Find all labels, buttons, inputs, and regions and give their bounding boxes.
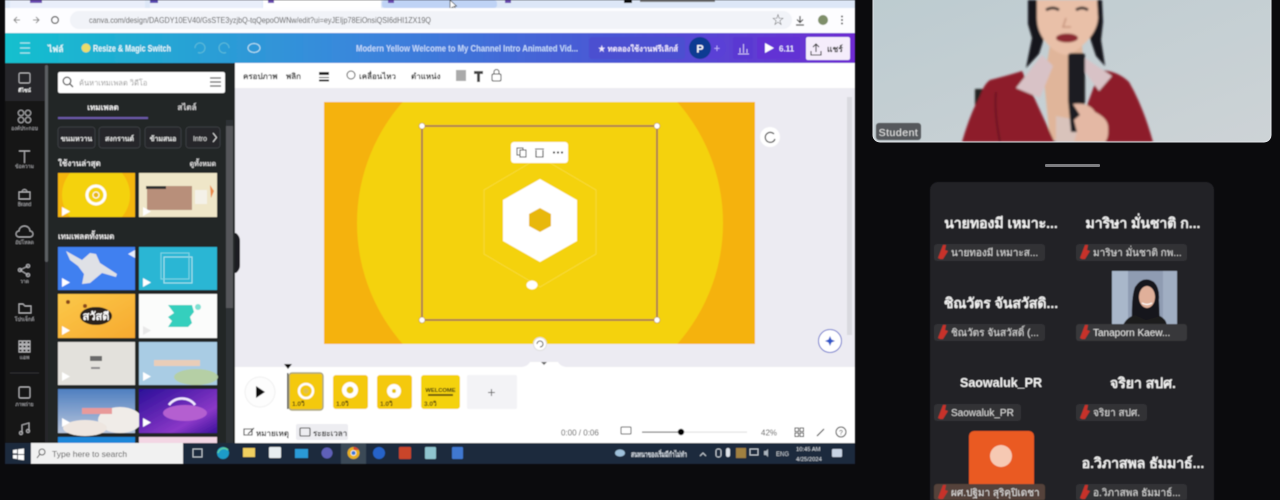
microphone <box>1068 53 1085 132</box>
filter chips: Intro <box>193 136 207 143</box>
notes and duration controls <box>244 424 348 440</box>
neck <box>1044 45 1085 140</box>
participant: ชิณวัตร: ชิณวัตร จันสวัสดิ์ (... <box>951 325 1039 339</box>
Student label <box>876 123 921 140</box>
search box: Type here to search <box>52 449 127 459</box>
left icon rail: อัปโหลด <box>15 239 34 246</box>
timeline strip <box>235 362 855 444</box>
browser tab strip <box>5 0 855 10</box>
Canva top bar: P <box>696 44 704 56</box>
time readout and zoom slider <box>561 427 846 438</box>
participant: Saowaluk_PR <box>934 376 1042 421</box>
selection frame <box>419 123 660 323</box>
participant: มาริษา: มาริษา มั่นชาติ ก... <box>1086 213 1200 231</box>
template side panel <box>48 63 235 444</box>
filter chips: สงกรานต์ <box>105 134 134 143</box>
participant: มาริษา: มาริษา มั่นชาติ กพ... <box>1093 245 1182 259</box>
browser address bar: ☆ <box>772 13 784 27</box>
thumbnail: white with teal blob <box>139 294 217 338</box>
hand <box>1073 104 1108 142</box>
participant: ชิณวัตร <box>934 295 1058 341</box>
yellow circle <box>356 102 724 344</box>
system tray <box>615 447 842 463</box>
left icon rail: โปรเจ็กต์ <box>15 315 34 323</box>
recently used heading <box>58 157 216 169</box>
outer faint hexagon <box>484 157 596 287</box>
nose shadow <box>1063 18 1071 27</box>
left icon rail: องค์ประกอบ <box>11 125 38 132</box>
refresh button <box>760 127 780 147</box>
collar left <box>1016 55 1053 98</box>
participant: ชิณวัตร: ชิณวัตร จันสวัสดิ... <box>944 295 1058 311</box>
magic assistant button <box>818 330 842 352</box>
Canva top bar <box>5 33 855 63</box>
Windows taskbar <box>5 443 855 464</box>
left icon rail: ข้อความ <box>15 163 34 170</box>
editor toolbar <box>235 63 855 88</box>
participant: มาริษา <box>1076 213 1200 261</box>
editor toolbar: เคลื่อนไหว <box>359 70 397 81</box>
time readout and zoom slider: 0:00 / 0:06 <box>561 428 599 438</box>
time readout and zoom slider: ? <box>839 430 843 437</box>
left icon rail: ภาพถ่าย <box>15 402 34 408</box>
thumbnail: sky and leaves <box>139 342 218 385</box>
participant: จริยา <box>1076 375 1176 421</box>
left icon rail: Brand <box>18 202 31 208</box>
participant: นายทองมี: นายทองมี เหมาะ... <box>944 215 1058 231</box>
start button <box>13 448 24 460</box>
panel tabs: สไตล์ <box>177 102 197 112</box>
participant: นายทองมี <box>934 215 1058 261</box>
system tray: สนทนาของเริ่มมีกำไม่ทำ <box>631 448 687 459</box>
add clip button: + <box>487 384 496 400</box>
floating element toolbar <box>511 142 568 163</box>
small white dot <box>526 280 538 290</box>
search box <box>58 72 225 93</box>
Canva top bar: แชร์ <box>827 44 843 54</box>
left icon rail <box>5 63 48 444</box>
participant: Saowaluk_PR: Saowaluk_PR <box>951 408 1014 419</box>
thumbnail: teal frames <box>139 247 217 290</box>
participant: Saowaluk_PR: Saowaluk_PR <box>960 376 1042 390</box>
shared screen: browser window <box>5 0 855 464</box>
Canva top bar: 6.11 <box>779 44 795 54</box>
panel tabs: เทมเพลต <box>87 103 119 112</box>
thumbnail: blue splash <box>58 247 135 290</box>
pinned apps <box>193 443 463 464</box>
face <box>1037 0 1098 55</box>
participant: อ.วิภาสพล: อ.วิภาสพล ธัมมาธ์... <box>1082 455 1204 471</box>
notes and duration controls: ระยะเวลา <box>313 429 347 438</box>
system tray: 4/25/2024 <box>796 457 823 463</box>
Canva top bar: ★ ทดลองใช้งานฟรีเลิกส์ <box>598 44 678 54</box>
notes and duration controls: หมายเหตุ <box>256 429 289 439</box>
panel tabs <box>58 102 197 119</box>
thumbnail: orange greeting: สวัสดี <box>83 310 109 323</box>
participant: จริยา: จริยา สปศ. <box>1110 375 1176 391</box>
clip thumbnails <box>289 373 460 410</box>
Canva top bar: + <box>714 43 720 55</box>
eyes and brows <box>1046 8 1088 10</box>
thumbnail: orange greeting <box>58 294 135 338</box>
chair <box>975 89 985 105</box>
participants panel <box>930 182 1214 500</box>
playhead <box>284 364 292 369</box>
presenter <box>962 0 1153 142</box>
participant: orange avatar: ผศ.ปฐิมา สุริคุปิเดชา <box>951 488 1040 499</box>
play button <box>245 377 275 407</box>
participant: Tanaporn with photo: Tanaporn Kaew... <box>1093 328 1170 339</box>
partial thumbnails <box>58 437 217 444</box>
left icon rail: ดีไซน์ <box>18 87 31 94</box>
system tray: ENG <box>776 452 789 458</box>
rotate handle <box>534 338 546 350</box>
thumbnail: clouds <box>58 389 142 436</box>
white hexagon <box>503 179 577 262</box>
presenter video tile <box>873 0 1271 142</box>
participant: จริยา: จริยา สปศ. <box>1093 408 1140 419</box>
editor toolbar: พลิก <box>286 72 301 81</box>
inner hexagon <box>529 208 551 232</box>
lips <box>1056 34 1078 42</box>
shirt <box>1056 116 1078 142</box>
design canvas <box>323 101 756 345</box>
video tile outline <box>873 0 1271 142</box>
participant: orange avatar <box>934 431 1045 500</box>
clip thumbnails: 1.0วิ <box>380 400 393 408</box>
clip thumbnails: 3.0วิ <box>424 400 437 408</box>
system tray: 10:45 AM <box>796 447 821 453</box>
Canva top bar: ไฟล์ <box>47 44 64 54</box>
participant: อ.วิภาสพล: อ.วิภาสพล ธัมมาธ์... <box>1093 487 1181 499</box>
panel scrollbar <box>226 120 233 444</box>
add clip button <box>467 375 517 409</box>
participant: นายทองมี: นายทองมี เหมาะส... <box>951 247 1038 259</box>
recently used heading: ใช้งานล่าสุด <box>58 158 101 169</box>
clip thumbnails: WELCOME <box>425 388 456 394</box>
participant: อ.วิภาสพล <box>1076 455 1204 500</box>
panel collapse handle <box>235 233 240 273</box>
Canva top bar: Resize & Magic Switch <box>93 44 171 54</box>
editor toolbar: ตำแหน่ง <box>411 72 441 81</box>
filter chips: ขนมหวาน <box>61 136 92 143</box>
collar right <box>1083 58 1112 91</box>
left icon rail: แอพ <box>20 355 29 361</box>
browser address bar: canva.com/design/DAGDY10EV40/GsSTE3yzjbQ-tqQepoOWNw/edit?ui=eyJEIjp78EiOnsiQSI6dHI1ZX19Q <box>89 15 431 25</box>
thumbnail: recent photo <box>139 173 217 217</box>
browser address bar <box>5 8 855 33</box>
thumbnail: purple neon <box>139 389 217 433</box>
participant: Tanaporn with photo <box>1076 271 1187 341</box>
thumbnail: recent yellow intro <box>57 172 136 218</box>
filter chips: ข้ามสนอ <box>150 134 176 143</box>
canvas scrollbar <box>847 97 852 335</box>
time readout and zoom slider: 42% <box>761 428 777 438</box>
all results heading: เทมเพลตทั้งหมด <box>58 230 114 241</box>
thumbnail: grey paper <box>58 342 135 385</box>
blazer <box>962 70 1153 142</box>
editor toolbar: ครอปภาพ <box>243 72 278 81</box>
left icon rail: วาด <box>20 279 29 285</box>
hair <box>1026 0 1105 68</box>
Student label: Student <box>879 127 918 139</box>
Canva top bar: Modern Yellow Welcome to My Channel Intro Animated Vid... <box>356 44 578 54</box>
recently used heading: ดูทั้งหมด <box>190 157 216 169</box>
filter chips <box>58 127 220 148</box>
drag handle <box>1045 164 1100 167</box>
search box <box>31 443 183 464</box>
search box: ค้นหาเทมเพลต วิดีโอ <box>79 78 147 88</box>
clip thumbnails: 1.0วิ <box>336 400 349 408</box>
clip thumbnails: 1.0วิ <box>292 400 305 408</box>
